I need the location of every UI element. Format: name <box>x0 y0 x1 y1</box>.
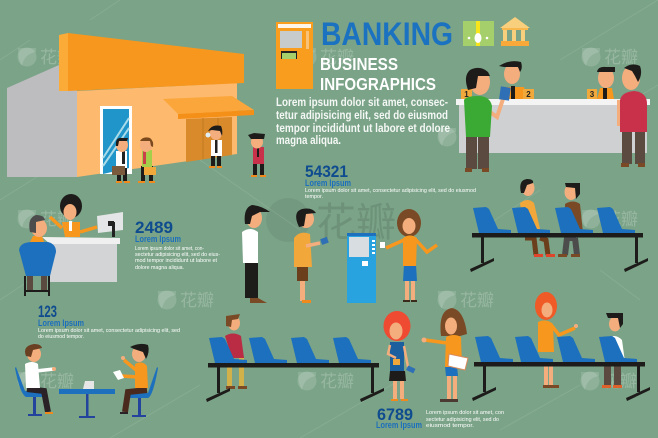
subheading: INFOGRAPHICS <box>320 74 436 94</box>
intro text: Lorem ipsum dolor sit amet, consec- <box>276 97 448 109</box>
left chair <box>15 367 45 416</box>
meeting table scene <box>15 344 158 418</box>
woman with orange hair <box>535 292 578 388</box>
stat: 54321 <box>305 162 476 200</box>
subheading <box>320 54 436 94</box>
stat: 6789: 6789 <box>377 405 413 424</box>
stat: 2489: sectetur adipisicing elit, sed do eius- <box>135 252 220 258</box>
seated man on left bench <box>225 314 247 389</box>
person: man on phone <box>206 126 222 168</box>
stat: 2489 <box>135 218 220 271</box>
woman with red hair <box>384 311 415 401</box>
stat: 2489: mod tempor incididunt ut labore et <box>135 258 217 264</box>
stat: 123: Lorem ipsum dolor sit amet, consectetur adipisicing elit, sed <box>38 328 180 334</box>
stat: 123: Lorem Ipsum <box>38 318 84 328</box>
number signs: 2 <box>526 90 531 99</box>
teller woman <box>50 194 97 237</box>
teller 1 <box>499 61 527 99</box>
number signs <box>461 89 597 99</box>
stat: 6789: eiusmod tempor. <box>426 423 474 429</box>
right man <box>113 344 149 414</box>
stat: 2489: 2489 <box>135 218 173 237</box>
subheading: BUSINESS <box>320 54 398 74</box>
watermarks: 花瓣 <box>316 201 396 245</box>
stat: 2489: Lorem Ipsum <box>135 234 181 244</box>
woman assistant <box>380 209 437 302</box>
stat: 54321: Lorem ipsum dolor sit amet, consectetur adipisicing elit, sed do eiusmod <box>305 188 476 194</box>
customer in red <box>617 64 647 167</box>
intro text <box>276 97 450 147</box>
intro text: tempor incididunt ut labore et dolore <box>276 123 450 135</box>
ATM machine <box>347 233 376 303</box>
icon: bank building <box>500 17 530 46</box>
right chair <box>129 367 158 417</box>
left bench <box>206 337 384 402</box>
seated man on right bench <box>602 313 625 388</box>
bank building <box>7 33 254 177</box>
stat: 2489: Lorem ipsum dolor sit amet, con- <box>135 246 204 252</box>
icon: banknotes <box>463 21 494 46</box>
service desk with teller <box>19 194 123 296</box>
stat: 54321: 54321 <box>305 162 348 181</box>
number signs: 1 <box>464 90 469 99</box>
wooden entrance <box>186 117 232 162</box>
stat: 6789: Lorem Ipsum <box>376 420 422 430</box>
watermarks <box>18 48 638 391</box>
seated people on upper bench <box>520 179 583 257</box>
stat: 123: do eiusmod tempor. <box>38 334 84 340</box>
teller 3 <box>597 67 615 99</box>
stat: 6789 <box>376 405 504 430</box>
left man <box>25 344 56 414</box>
right bench <box>472 336 650 401</box>
customer in green <box>464 68 511 172</box>
icon: orange ATM <box>276 22 313 89</box>
stat: 123: 123 <box>38 302 57 321</box>
customer on chair <box>19 215 56 296</box>
desk <box>42 237 120 282</box>
title block <box>276 16 530 147</box>
bank counter scene <box>456 61 650 172</box>
person: man in red shirt <box>248 133 266 177</box>
stat: 6789: Lorem ipsum dolor sit amet, con <box>426 410 504 416</box>
counter <box>456 99 650 153</box>
heading: Banking: BANKING <box>321 16 453 52</box>
upper bench <box>470 207 648 272</box>
door <box>100 106 132 174</box>
stat: 54321: Lorem Ipsum <box>305 178 351 188</box>
person: man in green shirt <box>138 137 156 183</box>
stat: 123 <box>38 302 180 340</box>
number signs: 3 <box>590 90 595 99</box>
queue: man in white shirt <box>242 205 270 303</box>
person: man with briefcase <box>112 138 130 183</box>
stat: 54321: tempor. <box>305 194 323 200</box>
woman with folder <box>422 308 468 402</box>
queue: man at ATM <box>294 208 329 303</box>
intro text: tetur adipisicing elit, sed do eiusmod <box>276 110 448 122</box>
monitor <box>97 212 123 237</box>
table with laptop <box>59 381 115 418</box>
intro text: magna aliqua. <box>276 135 341 147</box>
stat: 6789: sectetur adipisicing elit, sed do <box>426 417 499 423</box>
stat: 2489: dolore magna aliqua. <box>135 265 184 271</box>
awning <box>163 96 254 119</box>
